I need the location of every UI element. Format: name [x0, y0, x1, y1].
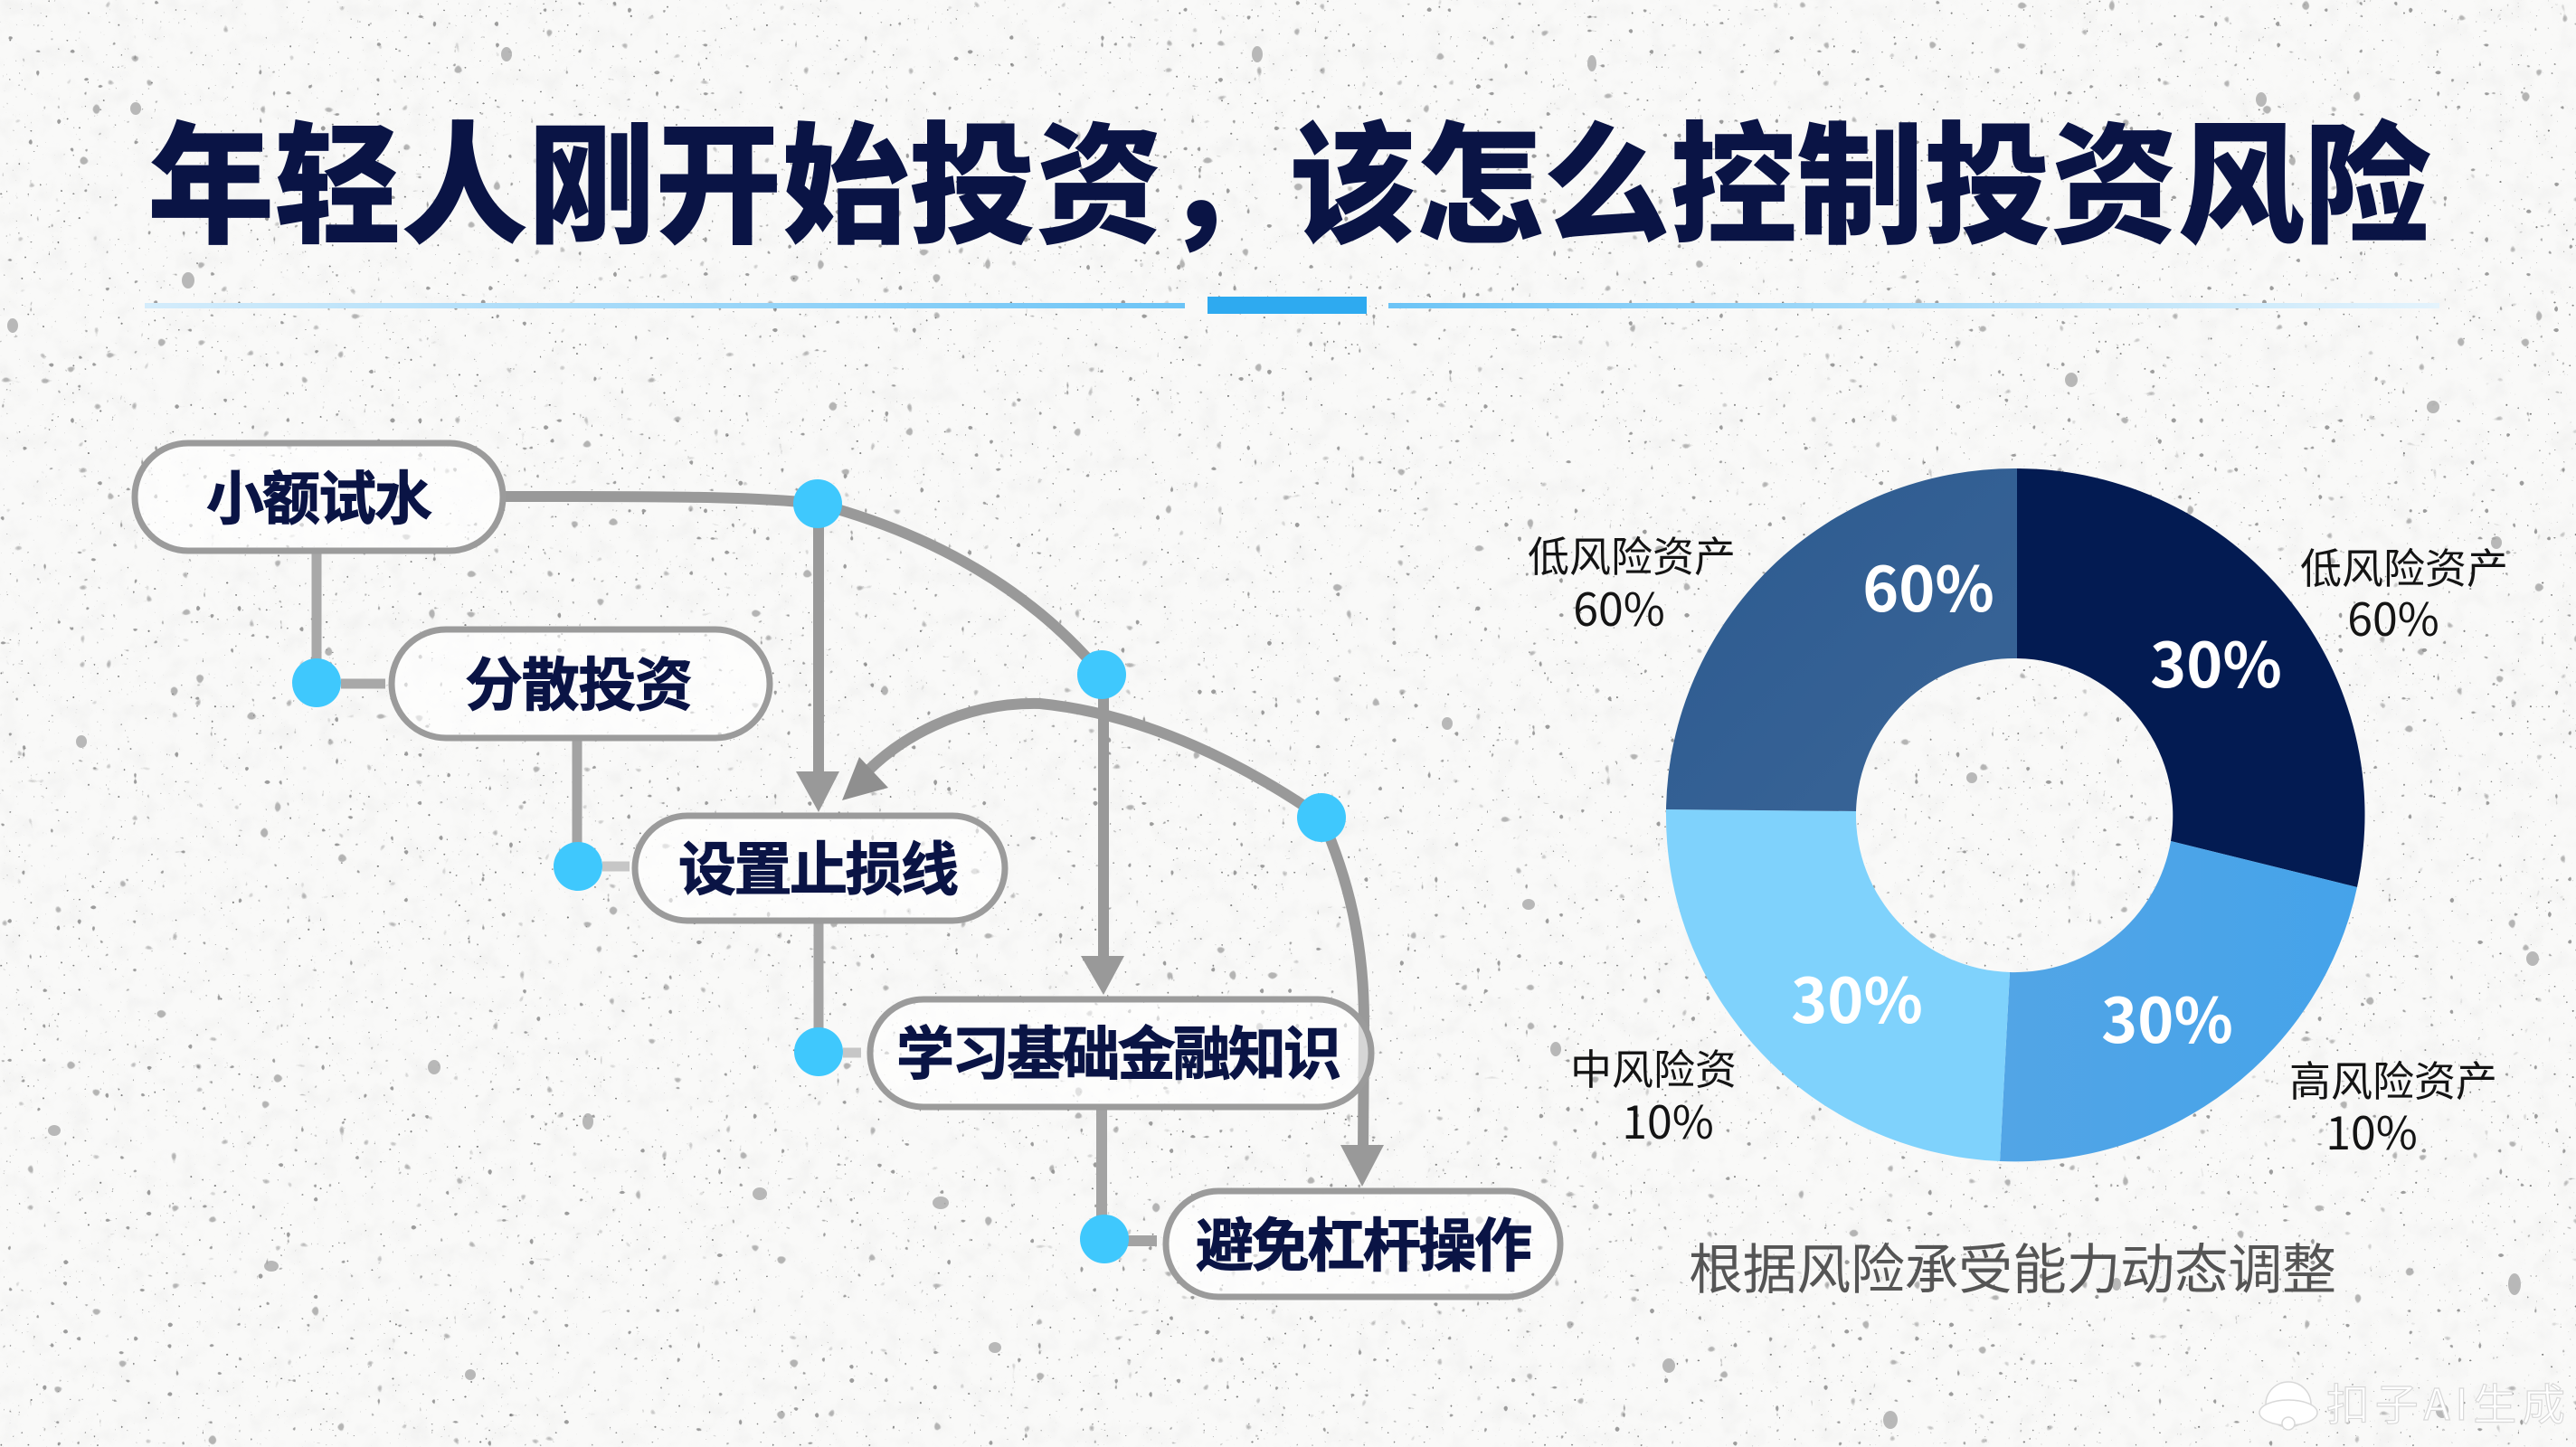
value: 60%: 60% [1862, 540, 1994, 629]
label: lower left: 中风险资 [1570, 1037, 1737, 1097]
node: 学习基础金融知识 [870, 999, 1371, 1107]
segment: dark navy [2017, 468, 2365, 887]
label: upper right [2300, 536, 2508, 649]
label: lower right: 高风险资产 [2289, 1049, 2497, 1109]
node: 避免杠杆操作: 避免杠杆操作 [1196, 1200, 1532, 1283]
node: 小额试水 [135, 443, 503, 551]
icon: watermark mascot [2259, 1382, 2317, 1430]
label: upper left: 60% [1573, 574, 1665, 639]
label: lower left [1570, 1037, 1737, 1152]
label: lower left: 10% [1622, 1087, 1714, 1152]
node: 学习基础金融知识: 学习基础金融知识 [896, 1008, 1341, 1092]
value: 30% blue: 30% [2101, 971, 2233, 1061]
flowchart [135, 443, 1560, 1297]
node: 设置止损线 [635, 816, 1005, 921]
title: 年轻人刚开始投资，该怎么控制投资风险 [147, 80, 2431, 271]
node: 小额试水: 小额试水 [206, 453, 432, 536]
label: lower right: 10% [2325, 1098, 2418, 1163]
arrow: curve down to 避免杠杆操作 [1321, 818, 1384, 1187]
connector: 分散投资 to 设置止损线 [577, 741, 630, 866]
arrow: down to 设置止损线 [796, 504, 839, 812]
connector: 学习基础金融知识 to 避免杠杆操作 [1102, 1110, 1157, 1241]
node: 设置止损线: 设置止损线 [678, 824, 959, 907]
junction dots [292, 479, 1346, 1263]
arrow: curve back to 设置止损线 [842, 704, 1321, 818]
value: 30% light: 30% [1791, 951, 1923, 1041]
connector: top curve from 小额试水 [506, 497, 1102, 675]
connector: 设置止损线 to 学习基础金融知识 [819, 923, 861, 1053]
title divider [145, 297, 2439, 314]
watermark: 扣子AI生成 [2326, 1369, 2565, 1433]
node: 避免杠杆操作 [1166, 1191, 1560, 1297]
segment: mid blue [1666, 468, 2017, 811]
label: upper left [1528, 525, 1736, 639]
node: 分散投资: 分散投资 [465, 639, 693, 723]
value: 30% navy: 30% [2150, 616, 2282, 705]
label: upper right: 低风险资产 [2300, 536, 2508, 596]
donut chart [1666, 468, 2365, 1161]
connector: 小额试水 to 分散投资 [317, 553, 385, 684]
node: 分散投资 [392, 629, 770, 738]
label: upper right: 60% [2347, 584, 2439, 649]
label: lower right [2289, 1049, 2497, 1163]
caption: 根据风险承受能力动态调整 [1689, 1226, 2336, 1305]
segment: light blue [1666, 809, 2010, 1161]
arrow: down to 学习基础金融知识 [1081, 675, 1124, 995]
label: upper left: 低风险资产 [1528, 525, 1736, 584]
segment: blue [2000, 841, 2357, 1161]
